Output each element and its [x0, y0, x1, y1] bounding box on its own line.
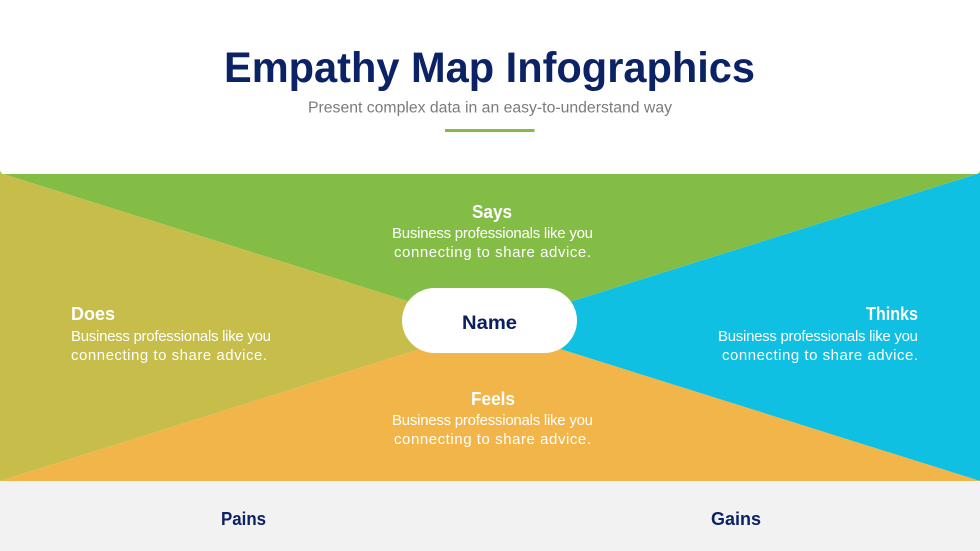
gains label: Gains — [711, 509, 761, 529]
says text — [392, 225, 593, 261]
thinks text: connecting to share advice. — [722, 347, 918, 364]
name label: Name — [462, 313, 517, 334]
does text: connecting to share advice. — [71, 347, 267, 364]
panel: says — [0, 170, 980, 327]
says heading: Says — [472, 202, 512, 222]
pains label: Pains — [221, 509, 266, 529]
does text — [71, 328, 271, 364]
subtitle: Present complex data in an easy-to-understand way — [308, 100, 672, 116]
feels text: connecting to share advice. — [394, 431, 591, 448]
accent bar — [445, 129, 534, 132]
thinks heading: Thinks — [866, 304, 918, 324]
feels text: Business professionals like you — [392, 412, 593, 429]
panel: does — [0, 173, 490, 481]
title: Empathy Map Infographics — [224, 44, 755, 92]
feels text — [392, 412, 593, 448]
thinks text: Business professionals like you — [718, 328, 918, 345]
says text: connecting to share advice. — [394, 244, 591, 261]
says text: Business professionals like you — [392, 225, 593, 242]
header panel — [0, 0, 980, 174]
center name pill — [402, 288, 577, 353]
panel: thinks — [490, 173, 980, 481]
panel: pains and gains — [0, 481, 980, 551]
does text: Business professionals like you — [71, 328, 271, 345]
panel: feels — [0, 327, 980, 481]
does heading: Does — [71, 304, 115, 324]
thinks text — [718, 328, 918, 364]
feels heading: Feels — [471, 389, 515, 409]
